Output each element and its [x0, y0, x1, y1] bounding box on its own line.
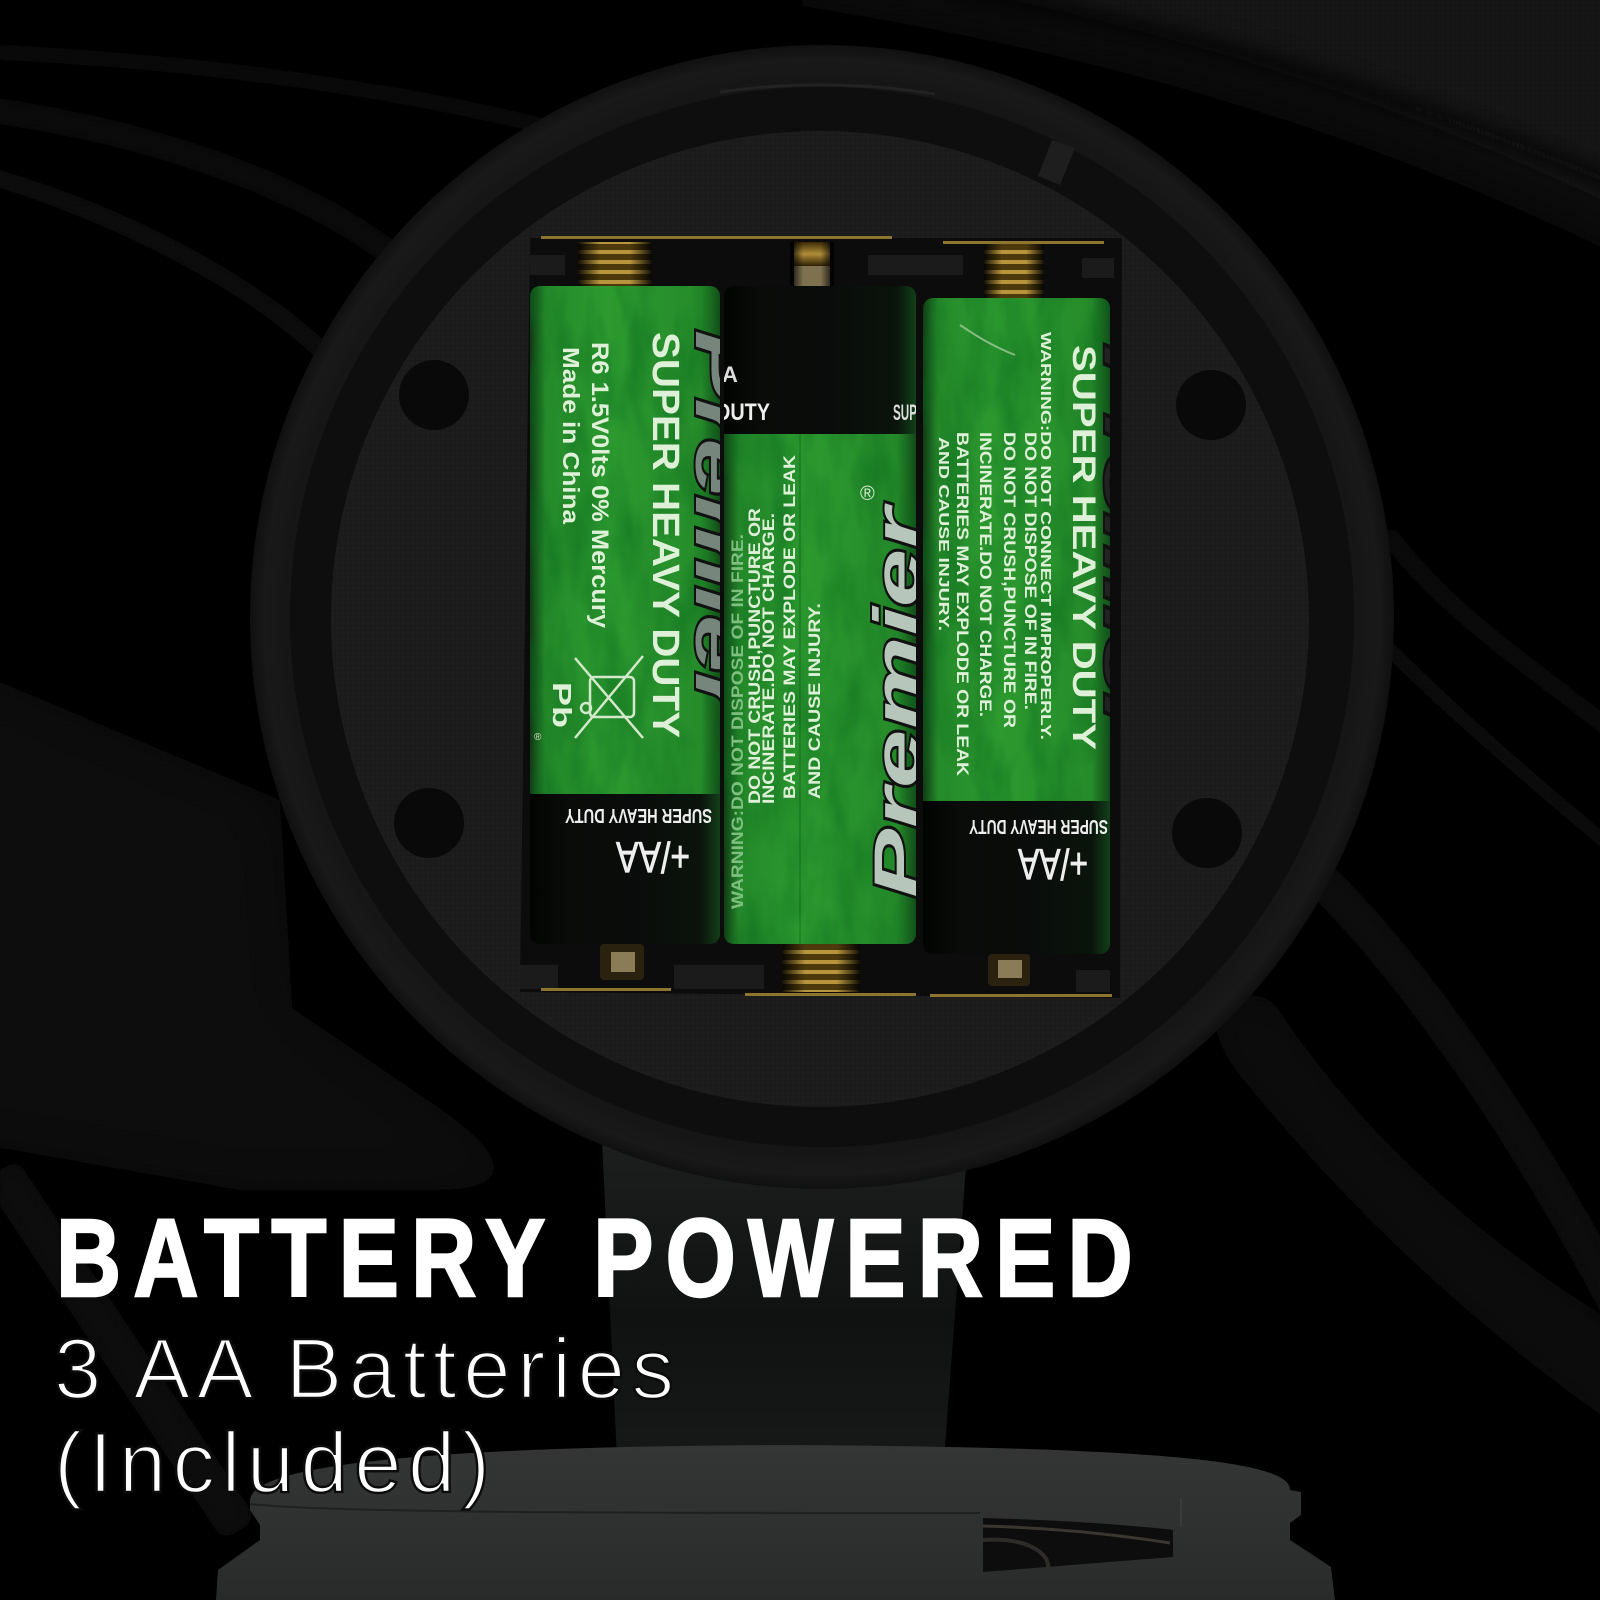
label: warning text: AND CAUSE INJURY.: [805, 603, 824, 799]
label: warning text: AND CAUSE INJURY.: [935, 437, 952, 631]
label: inverted AA: +/AA: [616, 832, 690, 881]
subtitle line 2: (Included): [54, 1416, 490, 1511]
label: warning text: DO NOT CRUSH,PUNCTURE OR: [745, 508, 764, 804]
contact spring top left: [578, 242, 652, 286]
label: warning text: [728, 454, 824, 909]
contact spring top right: [984, 244, 1044, 298]
battery plate: [331, 131, 1309, 1107]
battery compartment: [520, 236, 1122, 998]
icon: crossed-out bin: [575, 656, 643, 738]
label: warning text: WARNING:DO NOT CONNECT IMPROPERLY.: [1037, 332, 1054, 740]
contact spring bottom middle: [782, 944, 860, 992]
contact nipple bottom right: [988, 954, 1030, 986]
label: warning text: WARNING:DO NOT DISPOSE OF IN FIRE.: [728, 534, 747, 909]
label: top band fragment: SUP: [893, 400, 917, 425]
battery left: [530, 286, 720, 944]
subtitle line 1: 3 AA Batteries: [54, 1322, 674, 1417]
title: BATTERY POWERED: [56, 1198, 1133, 1320]
label: warning text: INCINERATE.DO NOT CHARGE.: [759, 513, 778, 804]
label: lead mark: Pb: [547, 682, 577, 728]
screw hole bottom right: [1172, 798, 1242, 868]
label: warning text: BATTERIES MAY EXPLODE OR LEAK: [780, 454, 799, 799]
subtitle: [54, 1322, 674, 1511]
label: warning text: DO NOT CRUSH,PUNCTURE OR: [1000, 432, 1019, 728]
label: top band text: DUTY: [716, 399, 770, 426]
outer ring: [250, 45, 1394, 1189]
screw hole top left: [399, 360, 469, 430]
label: brand: Premier: [682, 330, 754, 717]
screw hole bottom left: [394, 788, 464, 858]
label: brand: Premier: [860, 503, 934, 899]
battery middle: [724, 286, 916, 944]
device back housing: [250, 45, 1394, 1189]
contact nipple bottom left: [600, 944, 644, 980]
contact nipple top middle: [790, 242, 834, 286]
label: top band AA: A: [722, 362, 738, 387]
screw hole top right: [1176, 370, 1246, 440]
recessed annulus: [290, 87, 1354, 1147]
ring notches: [720, 85, 1075, 185]
plastic tabs: [520, 255, 1114, 992]
label: voltage: R6 1.5V0lts 0% Mercury: [586, 342, 613, 629]
registered mark: ®: [860, 483, 875, 505]
label: warning text: [935, 332, 1054, 777]
product base: [216, 1445, 1335, 1600]
label: brand: Premier: [1094, 345, 1150, 740]
registered mark: ®: [534, 732, 542, 743]
label: warning text: DO NOT DISPOSE OF IN FIRE.: [1021, 432, 1040, 710]
label: inverted super heavy duty: SUPER HEAVY DUTY: [969, 815, 1108, 837]
battery right: [923, 298, 1110, 954]
base opening: [983, 1518, 1173, 1572]
label: inverted AA: +/AA: [1018, 839, 1088, 888]
label: super heavy duty: SUPER HEAVY DUTY: [1066, 345, 1102, 750]
label: inverted super heavy duty: SUPER HEAVY DUTY: [565, 804, 712, 826]
label: warning text: BATTERIES MAY EXPLODE OR LEAK: [953, 432, 972, 777]
label: origin: Made in China: [558, 347, 584, 524]
gold contact strips: [541, 236, 1112, 997]
product stem: [602, 1140, 968, 1460]
label: warning text: INCINERATE.DO NOT CHARGE.: [976, 432, 995, 717]
label: super heavy duty: SUPER HEAVY DUTY: [644, 332, 686, 738]
